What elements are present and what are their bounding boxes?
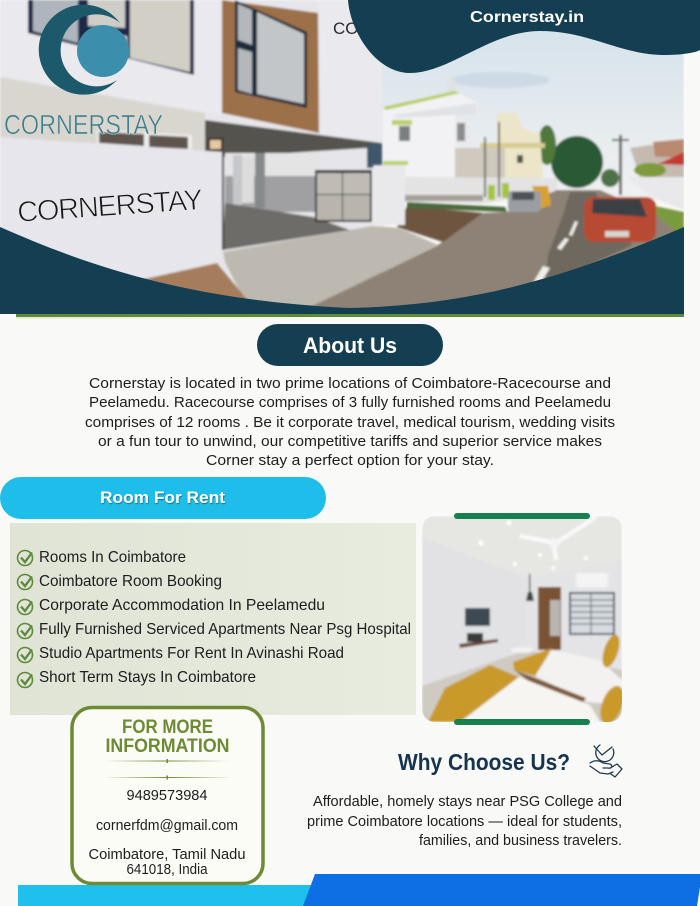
- panel: room list: [10, 523, 416, 715]
- panel: hero photo: [0, 0, 684, 314]
- email: cornerfdm@gmail.com: [96, 818, 238, 834]
- heading: Room For Rent: [0, 477, 326, 519]
- card heading: [106, 717, 230, 757]
- card heading: FOR MORE: [122, 717, 213, 738]
- logo: [4, 5, 163, 140]
- icon: hand with check: [590, 745, 622, 777]
- about text block: Cornerstay is located in two prime locations of Coimbatore-Racecourse and: [89, 375, 611, 392]
- about text block: or a fun tour to unwind, our competitive tariffs and superior service makes: [98, 433, 602, 450]
- room photo top bar: [454, 513, 590, 519]
- heading text: Room For Rent: [100, 488, 225, 507]
- photo: street scene: [312, 31, 684, 308]
- logo wordmark: CORNERSTAY: [4, 109, 163, 140]
- heading pill: [257, 324, 443, 366]
- card heading: INFORMATION: [106, 736, 230, 757]
- pale band under divider: [16, 317, 316, 319]
- about text block: [85, 375, 615, 469]
- heading pill: [0, 477, 326, 519]
- item 5: Studio Apartments For Rent In Avinashi Road: [39, 645, 344, 662]
- phone: 9489573984: [126, 788, 208, 804]
- bottom teal wave: [0, 227, 684, 314]
- bottom cyan band: [18, 885, 318, 906]
- address: [88, 847, 246, 878]
- panel: contact card: [72, 708, 263, 884]
- about text block: comprises of 12 rooms . Be it corporate travel, medical tourism, wedding visits: [85, 414, 615, 431]
- icon: check 6: [18, 672, 32, 688]
- why choose us text block: Affordable, homely stays near PSG College and: [313, 794, 622, 810]
- why choose us text block: [307, 794, 622, 849]
- panel background: [10, 523, 416, 715]
- icon: check 1: [18, 550, 32, 566]
- card box: [72, 708, 263, 884]
- icon: check 4: [18, 624, 32, 638]
- about text block: Peelamedu. Racecourse comprises of 3 fully furnished rooms and Peelamedu: [89, 394, 611, 411]
- site name: Cornerstay.in: [470, 9, 584, 26]
- item 6: Short Term Stays In Coimbatore: [39, 669, 256, 686]
- logo circle: [77, 25, 129, 77]
- room photo bottom bar: [454, 719, 590, 725]
- photo: hotel room: [422, 516, 628, 727]
- heading: About Us: [257, 324, 443, 366]
- heading: Why Choose Us: Why Choose Us?: [398, 749, 570, 775]
- green divider under hero: [16, 314, 684, 317]
- item 2: Coimbatore Room Booking: [39, 573, 222, 590]
- wall sign lettering: CORNERSTAY: [16, 184, 204, 229]
- item 4: Fully Furnished Serviced Apartments Near Psg Hospital: [39, 621, 411, 638]
- heading text: About Us: [303, 333, 397, 358]
- icon: check 2: [18, 574, 32, 590]
- top wave banner: [348, 0, 700, 73]
- item 3: Corporate Accommodation In Peelamedu: [39, 597, 325, 614]
- why choose us text block: families, and business travelers.: [419, 833, 622, 849]
- address: Coimbatore, Tamil Nadu: [88, 847, 246, 863]
- icon: check 3: [18, 600, 32, 614]
- logo crescent: [39, 5, 120, 95]
- item 1: Rooms In Coimbatore: [39, 549, 186, 566]
- about text block: Corner stay a perfect option for your stay.: [206, 452, 494, 469]
- upper wall sign: CO: [333, 19, 358, 38]
- address: 641018, India: [126, 862, 208, 878]
- photo: Cornerstay building: [0, 0, 438, 314]
- bottom blue band: [303, 874, 700, 906]
- why choose us text block: prime Coimbatore locations — ideal for students,: [307, 814, 622, 830]
- icon: check 5: [18, 648, 32, 662]
